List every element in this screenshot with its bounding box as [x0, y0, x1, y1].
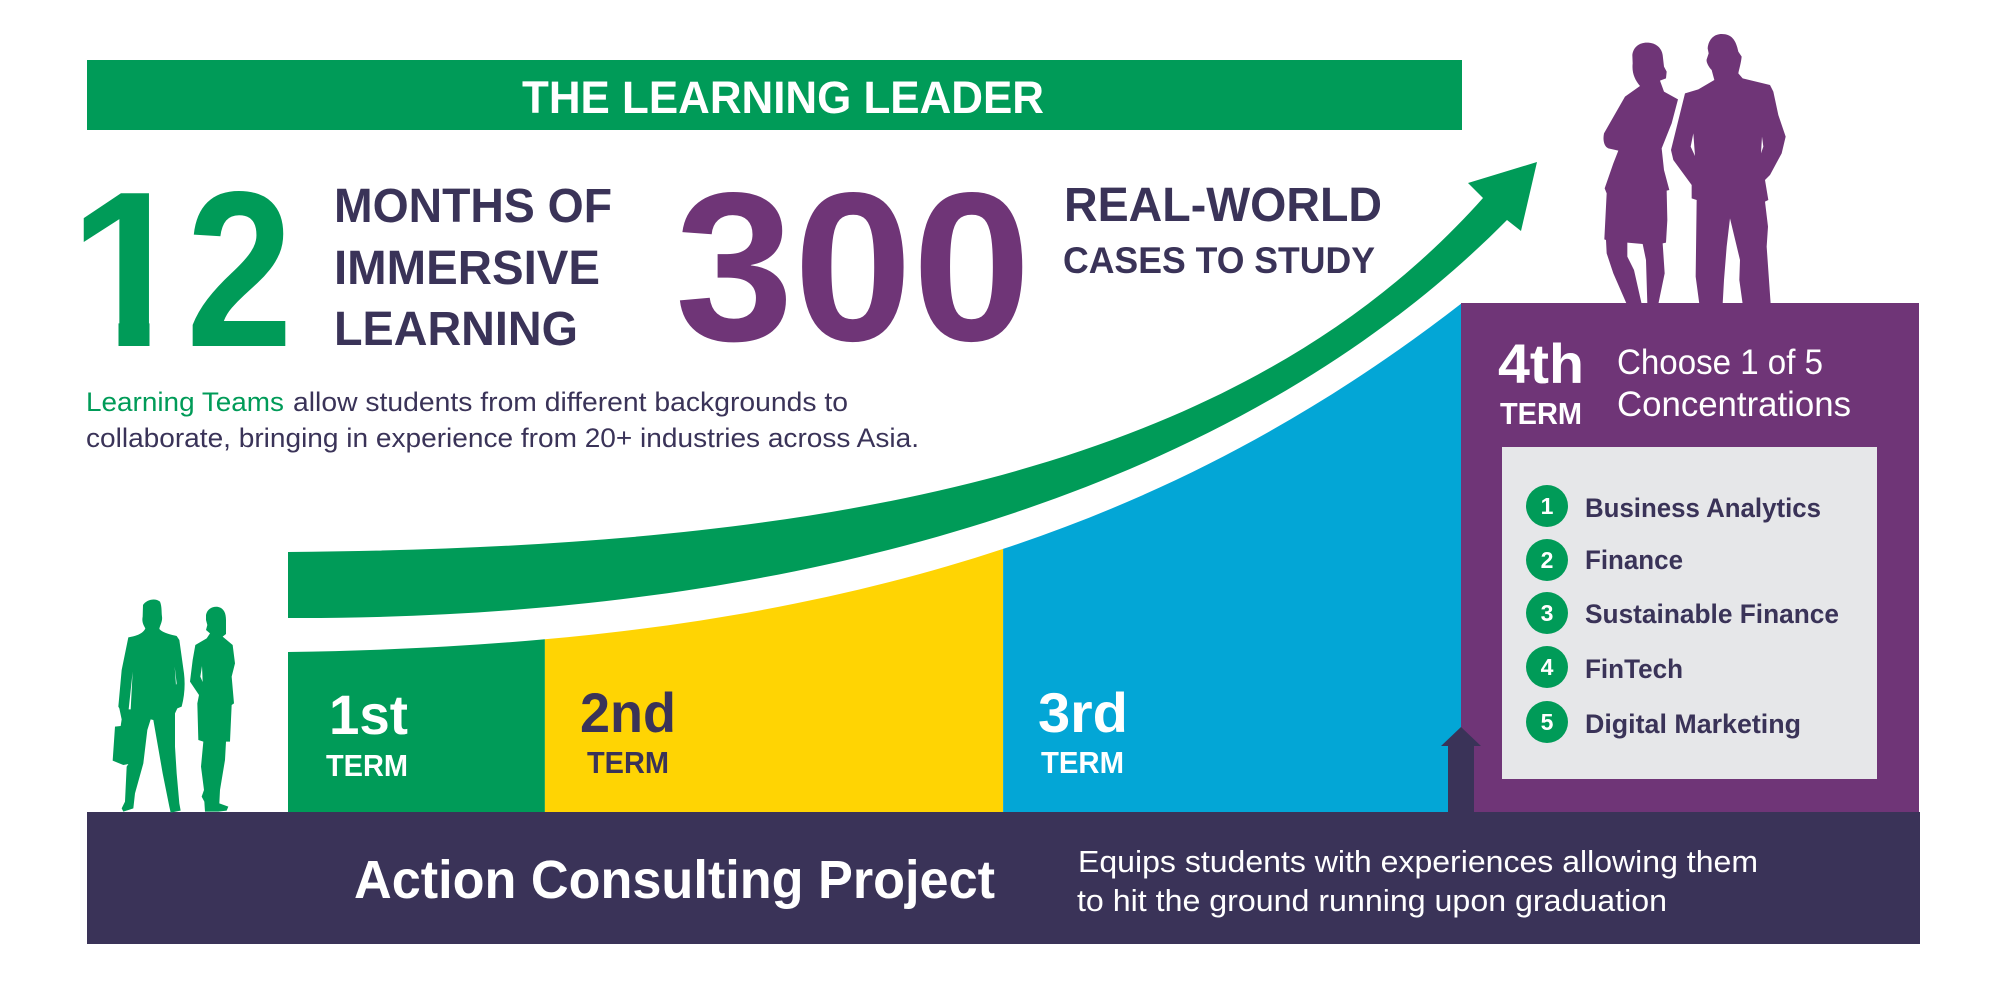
project description: to hit the ground running upon graduation: [1077, 884, 1667, 918]
term label: TERM: [1500, 396, 1582, 431]
item 3: Sustainable Finance: [1585, 599, 1839, 629]
term label: TERM: [1041, 745, 1124, 780]
silhouette: green business people: [113, 599, 235, 813]
number 12: [60, 146, 293, 394]
concentrations list panel: [1502, 447, 1877, 779]
1st term block: [288, 639, 545, 812]
title banner: [87, 60, 1462, 130]
learning teams paragraph: [86, 387, 919, 453]
real-world label: REAL-WORLD: [1064, 179, 1382, 232]
green man with briefcase: [113, 599, 185, 813]
item 3: 3: [1541, 600, 1553, 626]
learning teams paragraph: Learning Teams: [86, 387, 284, 417]
stat: 12 months: [60, 146, 612, 394]
item 2: [1526, 539, 1683, 581]
title text: THE LEARNING LEADER: [522, 72, 1044, 123]
item 4: [1526, 646, 1683, 688]
item 5: 5: [1541, 709, 1554, 735]
item 2: Finance: [1585, 545, 1683, 575]
months label: [334, 180, 612, 356]
stat: 300 cases: [675, 148, 1382, 385]
3rd label: 3rd: [1038, 681, 1128, 744]
term label: TERM: [326, 748, 408, 783]
green woman: [190, 607, 235, 812]
project heading: Action Consulting Project: [354, 850, 995, 910]
item 1: Business Analytics: [1585, 493, 1821, 523]
purple woman: [1604, 43, 1678, 304]
2nd label: 2nd: [580, 681, 676, 744]
growth arrow: [288, 162, 1537, 618]
up arrow from project to 4th term: [1441, 727, 1481, 812]
item 4: 4: [1541, 654, 1554, 680]
months label: IMMERSIVE: [334, 242, 600, 295]
project description: Equips students with experiences allowing them: [1078, 845, 1758, 879]
action consulting bar: [87, 812, 1920, 944]
item 5: [1526, 701, 1801, 743]
learning teams paragraph: collaborate, bringing in experience from 20+ industries across Asia.: [86, 423, 919, 453]
item 5: Digital Marketing: [1585, 709, 1801, 739]
learning teams paragraph: allow students from different backgrounds to: [293, 387, 848, 417]
project description: [1077, 845, 1758, 918]
purple man: [1671, 34, 1786, 304]
number 12: 1: [69, 146, 189, 394]
item 4: FinTech: [1585, 654, 1683, 684]
number 12: 2: [186, 146, 293, 394]
choose text: [1617, 343, 1851, 424]
item 1: [1526, 485, 1821, 527]
term label: TERM: [587, 745, 669, 780]
number 300: 300: [675, 148, 1031, 385]
real-world label: [1063, 179, 1382, 281]
1st label: 1st: [329, 683, 408, 746]
real-world label: CASES TO STUDY: [1063, 240, 1375, 281]
item 3: [1526, 592, 1839, 634]
choose text: Concentrations: [1617, 385, 1851, 424]
months label: MONTHS OF: [334, 180, 612, 233]
4th term panel: [1461, 303, 1919, 812]
2nd term block: [545, 549, 1003, 812]
months label: LEARNING: [334, 303, 578, 356]
item 1: 1: [1541, 493, 1554, 519]
4th label: 4th: [1498, 332, 1584, 395]
silhouette: purple business people: [1604, 34, 1786, 304]
choose text: Choose 1 of 5: [1617, 343, 1823, 382]
item 2: 2: [1541, 547, 1553, 573]
3rd term block: [1003, 303, 1462, 812]
